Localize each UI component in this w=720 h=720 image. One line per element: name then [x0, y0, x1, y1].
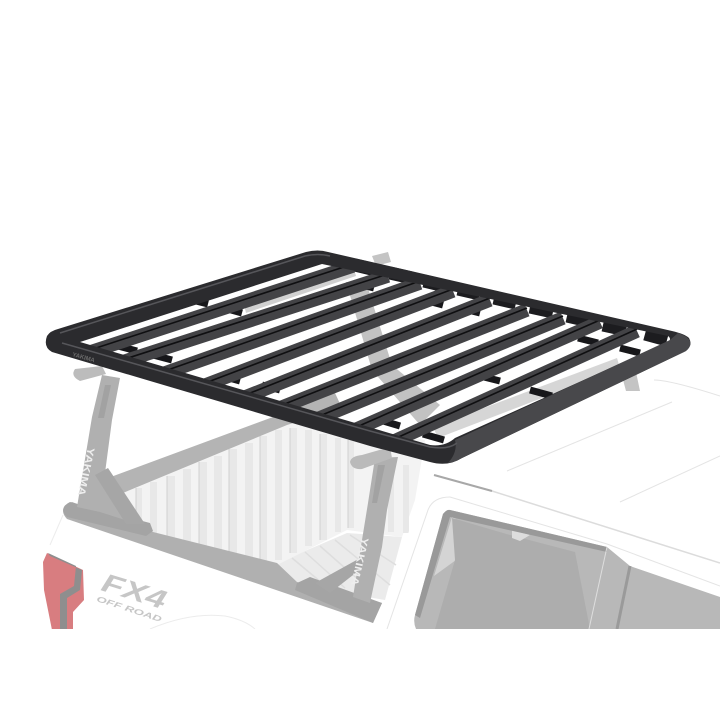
roof seam	[434, 475, 492, 491]
slats	[87, 266, 637, 442]
label: YAKIMA on rear stand: YAKIMA	[75, 446, 96, 497]
end blocks along the back rail	[355, 265, 667, 340]
truck and ghosted stands	[43, 366, 720, 630]
cross bars under the slats	[118, 283, 640, 440]
side windows	[414, 510, 720, 629]
product illustration: rack over truck	[43, 250, 720, 629]
far bed rail	[108, 393, 342, 495]
badge: FX4: FX4	[98, 567, 171, 615]
slats and cross bars clipped to the frame	[87, 264, 667, 442]
label: YAKIMA on front stand: YAKIMA	[348, 536, 370, 587]
near bed rail	[63, 502, 382, 623]
diagonal far stand	[346, 282, 440, 425]
badge: FX4: OFF ROAD	[95, 594, 163, 624]
rear stand with bracket	[73, 366, 145, 524]
outer frame	[46, 250, 690, 464]
far left crossbar	[243, 262, 356, 313]
bed floor	[277, 533, 402, 600]
truck rear body outline	[50, 515, 255, 629]
front rail highlight	[62, 343, 457, 448]
right rail	[448, 333, 690, 463]
taillight	[43, 553, 84, 630]
front mount foot	[295, 577, 382, 623]
far right stand	[622, 372, 640, 391]
front stand with bracket	[315, 447, 398, 603]
badge: FX4	[97, 574, 168, 621]
back rail highlight	[60, 254, 330, 333]
rear mount foot	[63, 502, 153, 536]
cab body	[408, 532, 409, 533]
rail logo: YAKIMA	[71, 352, 96, 364]
roof and door outlines	[387, 380, 720, 629]
roof rack	[46, 250, 691, 464]
corrugated bed wall	[117, 423, 425, 565]
far bracket	[372, 252, 391, 266]
bed floor ribs	[292, 535, 396, 590]
ghosted supports seen through the rack	[243, 252, 640, 438]
far right crossbar	[433, 358, 620, 438]
slat channels	[87, 264, 637, 440]
